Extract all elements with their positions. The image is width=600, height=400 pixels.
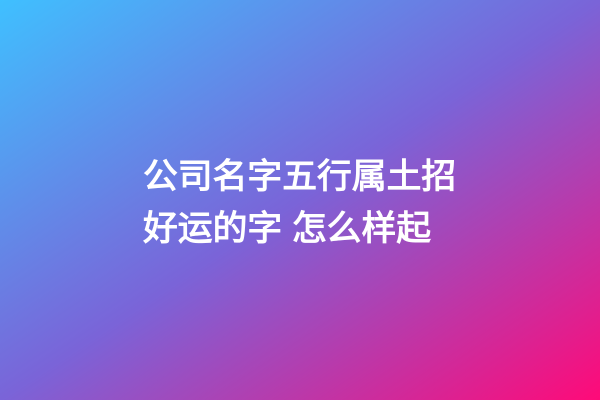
- title: [143, 157, 456, 248]
- title: 好运的字 怎么样起: [143, 209, 431, 248]
- title: 公司名字五行属土招: [143, 157, 456, 196]
